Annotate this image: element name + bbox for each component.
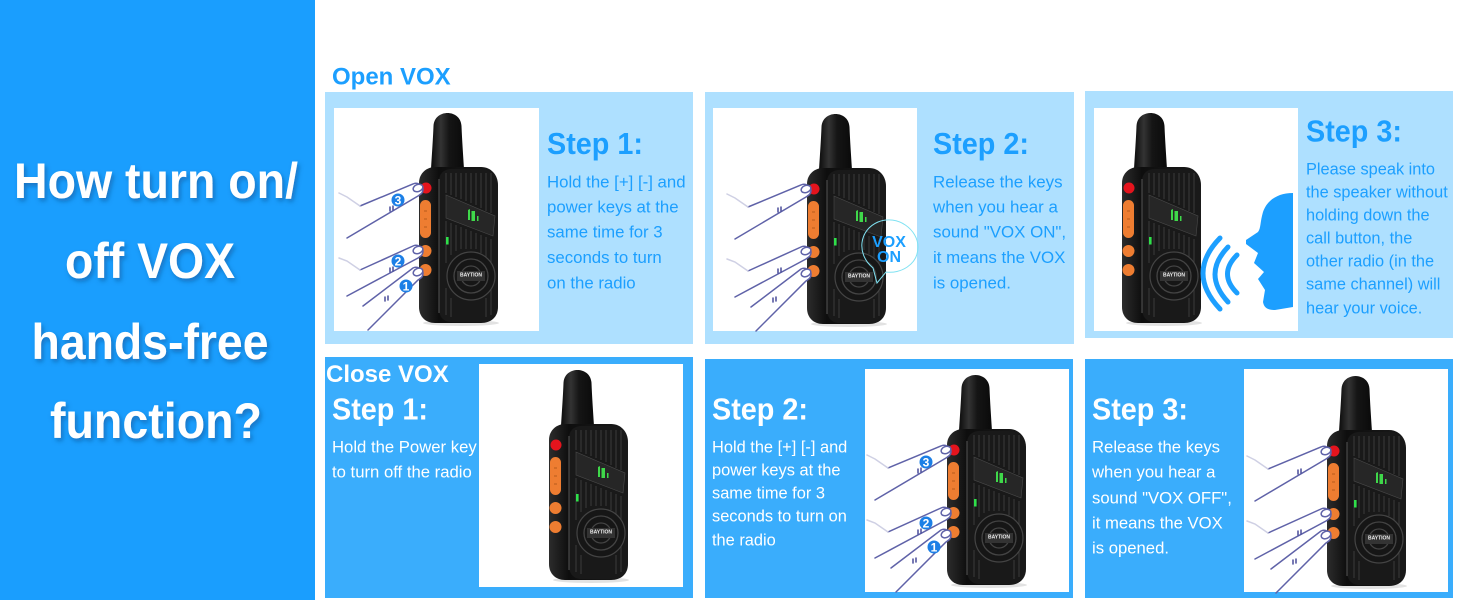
heading: Open VOX: Open VOX — [332, 64, 451, 90]
step text: seconds to turn on — [712, 508, 847, 526]
number badges: 3 — [395, 194, 402, 208]
icon: radio — [419, 113, 499, 326]
step text: Hold the Power key — [332, 438, 477, 456]
number badges: 3 — [923, 456, 930, 470]
step text — [932, 172, 1066, 292]
step text: Release the keys — [933, 172, 1063, 192]
step text: other radio (in the — [1306, 252, 1434, 270]
step text — [547, 172, 686, 292]
step text: power keys at the — [547, 198, 679, 216]
title: hands-free — [32, 314, 268, 370]
step text: Hold the [+] [-] and — [712, 438, 847, 456]
title: How turn on/ — [14, 153, 298, 209]
step text: same time for 3 — [712, 484, 825, 502]
icon: radio — [947, 375, 1027, 588]
step text: is opened. — [933, 274, 1011, 292]
step text — [1306, 160, 1448, 318]
number badges — [920, 456, 940, 554]
step text: the speaker without — [1306, 184, 1448, 202]
number badges: 1 — [931, 540, 938, 554]
icon: sound waves — [1203, 238, 1237, 309]
step text: it means the VOX — [1092, 514, 1223, 532]
step text: same channel) will — [1306, 276, 1440, 294]
step text — [332, 438, 477, 482]
icon: pressing fingers — [867, 445, 952, 592]
step text: when you hear a — [1091, 462, 1216, 482]
step heading: Step 3: — [1306, 114, 1402, 148]
step text: Hold the [+] [-] and — [547, 172, 686, 192]
icon: radio — [807, 114, 887, 327]
icon: radio — [549, 370, 629, 583]
step text: holding down the — [1306, 206, 1430, 224]
panel: title sidebar — [0, 0, 315, 600]
callout: VOX ON: ON — [877, 249, 901, 266]
step text: sound "VOX OFF", — [1092, 488, 1232, 508]
number badges: 1 — [403, 280, 410, 294]
number badges: 2 — [395, 254, 402, 268]
icon: speaking face — [1246, 193, 1293, 310]
step heading: Step 2: — [933, 126, 1029, 161]
step text: Release the keys — [1092, 438, 1220, 456]
panel: open step 3 — [1085, 91, 1453, 338]
step text: seconds to turn — [547, 248, 662, 267]
step text: to turn off the radio — [332, 462, 472, 482]
title: function? — [50, 393, 262, 449]
step heading: Step 1: — [332, 392, 428, 426]
step text: sound "VOX ON", — [933, 222, 1066, 242]
step text: the radio — [712, 532, 776, 550]
panel: open step 2 — [705, 92, 1074, 344]
step text: power keys at the — [712, 462, 840, 480]
step heading: Step 2: — [712, 392, 808, 426]
number badges — [392, 194, 412, 294]
panel: close step 3 — [1085, 359, 1453, 598]
icon: radio — [1327, 376, 1407, 589]
panel: open step 1 — [325, 92, 693, 344]
title: off VOX — [65, 233, 235, 289]
number badges: 2 — [923, 516, 930, 530]
icon: pressing fingers — [727, 184, 812, 331]
step text — [712, 438, 847, 550]
step text: is opened. — [1092, 538, 1169, 558]
step text: when you hear a — [932, 198, 1058, 216]
step text: it means the VOX — [933, 248, 1065, 267]
step heading: Step 3: — [1092, 392, 1188, 426]
title — [14, 153, 298, 449]
step text — [1091, 438, 1232, 558]
panel: close step 2 — [705, 359, 1073, 598]
panel: close step 1 — [325, 357, 693, 598]
callout: VOX ON: VOX — [872, 234, 906, 251]
heading: Close VOX: Close VOX — [326, 361, 449, 388]
icon: pressing fingers — [1247, 446, 1332, 593]
callout: VOX ON — [862, 220, 918, 283]
step text: call button, the — [1306, 230, 1412, 248]
step heading: Step 1: — [547, 126, 643, 161]
icon: radio — [1122, 113, 1202, 326]
step text: on the radio — [547, 274, 636, 292]
step text: same time for 3 — [547, 222, 663, 242]
step text: hear your voice. — [1306, 300, 1422, 318]
icon: pressing fingers — [339, 183, 424, 330]
step text: Please speak into — [1306, 160, 1435, 178]
